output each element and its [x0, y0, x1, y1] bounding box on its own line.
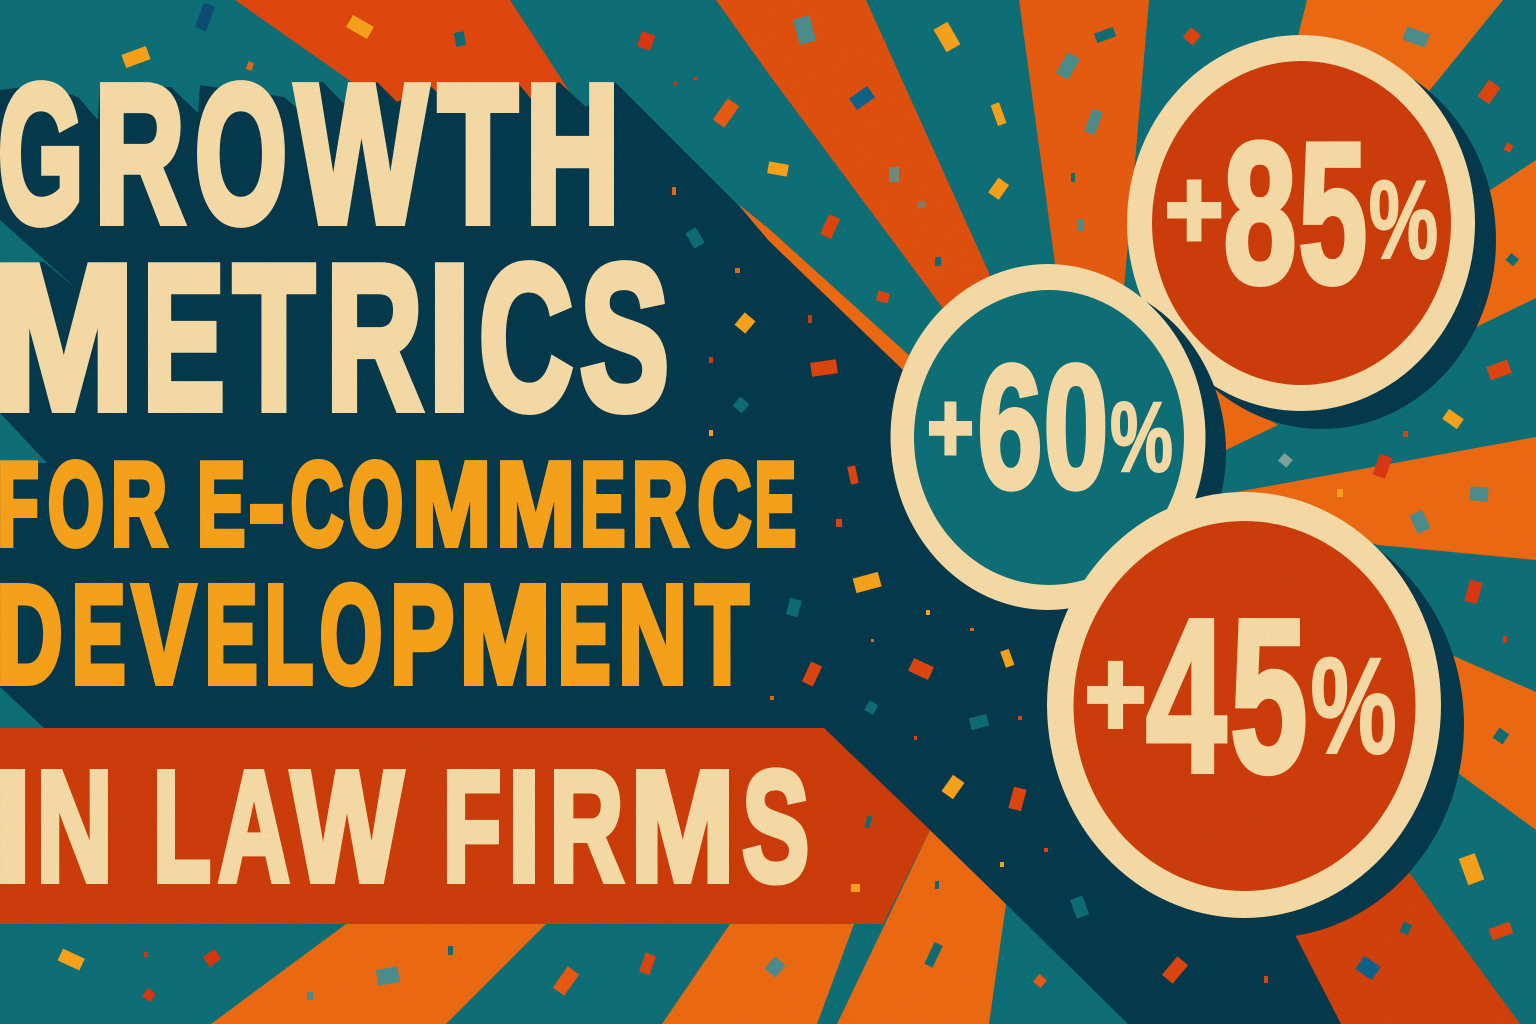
- badge: +60%: %: [1110, 381, 1173, 492]
- subtitle: FOR E-COMMERCE: R: [111, 438, 167, 571]
- title: METRICS: I: [428, 222, 471, 452]
- subtitle: FOR E-COMMERCE: M: [412, 438, 491, 571]
- title: METRICS: E: [142, 222, 225, 452]
- subtitle: FOR E-COMMERCE: C: [290, 438, 344, 571]
- badge: +60%: 0: [1043, 330, 1108, 526]
- subtitle: DEVELOPMENT: P: [390, 556, 454, 712]
- badge: +45%: 4: [1146, 575, 1226, 818]
- badge: +45%: +: [1084, 623, 1147, 764]
- title: GROWTH: G: [0, 44, 84, 264]
- subtitle: DEVELOPMENT: M: [459, 556, 551, 712]
- subtitle: FOR E-COMMERCE: E: [580, 438, 625, 571]
- subtitle: DEVELOPMENT: O: [320, 556, 382, 712]
- badge: +60%: [890, 264, 1226, 625]
- red banner: [0, 728, 930, 924]
- badge: +85%: [1127, 35, 1496, 429]
- subtitle: DEVELOPMENT: E: [558, 556, 611, 712]
- badge: +45%: [1047, 492, 1464, 938]
- badge: +85%: +: [1165, 146, 1224, 274]
- badge: +60%: +: [927, 372, 974, 482]
- subtitle: FOR E-COMMERCE: O: [348, 438, 403, 571]
- banner text: IN LAW FIRMS: F: [443, 740, 501, 914]
- subtitle: FOR E-COMMERCE: R: [632, 438, 688, 571]
- badge: +60%: 6: [977, 330, 1043, 526]
- badge: +45%: %: [1310, 630, 1397, 783]
- subtitle: DEVELOPMENT: E: [72, 556, 126, 712]
- banner text: IN LAW FIRMS: W: [291, 740, 403, 914]
- subtitle: DEVELOPMENT: V: [132, 556, 196, 712]
- title: METRICS: R: [326, 222, 423, 452]
- title: METRICS: T: [233, 222, 315, 452]
- banner text: IN LAW FIRMS: S: [742, 740, 809, 914]
- red ray, lower right: [1290, 860, 1520, 1024]
- badge: +85%: %: [1369, 158, 1438, 282]
- subtitle: DEVELOPMENT: T: [695, 556, 749, 712]
- banner text: IN LAW FIRMS: L: [153, 740, 211, 914]
- banner text: IN LAW FIRMS: A: [218, 740, 290, 914]
- banner text: IN LAW FIRMS: N: [36, 740, 113, 914]
- subtitle: DEVELOPMENT: N: [618, 556, 687, 712]
- subtitle: FOR E-COMMERCE: E: [754, 438, 796, 571]
- subtitle: DEVELOPMENT: E: [205, 556, 258, 712]
- title: GROWTH: W: [296, 44, 427, 264]
- thin orange strip: [738, 204, 912, 380]
- banner text: IN LAW FIRMS: R: [549, 740, 624, 914]
- teal slivers on left edge: [0, 220, 78, 728]
- subtitle: FOR E-COMMERCE: M: [496, 438, 575, 571]
- badge: +85%: 5: [1299, 102, 1367, 325]
- subtitle: FOR E-COMMERCE: O: [48, 438, 104, 571]
- subtitle: FOR E-COMMERCE: E: [197, 438, 245, 571]
- title: METRICS: C: [479, 222, 573, 452]
- subtitle: FOR E-COMMERCE: -: [248, 438, 284, 571]
- badge: +45%: 5: [1230, 575, 1308, 818]
- title: GROWTH: T: [438, 44, 518, 264]
- title: METRICS: S: [580, 222, 669, 452]
- title: GROWTH: H: [525, 44, 620, 264]
- subtitle: FOR E-COMMERCE: C: [697, 438, 751, 571]
- badge: +85%: 8: [1223, 102, 1297, 325]
- title: GROWTH: R: [94, 44, 185, 264]
- banner text: IN LAW FIRMS: I: [508, 740, 540, 914]
- subtitle: DEVELOPMENT: L: [265, 556, 313, 712]
- title: GROWTH: O: [195, 44, 287, 264]
- banner text: IN LAW FIRMS: M: [630, 740, 735, 914]
